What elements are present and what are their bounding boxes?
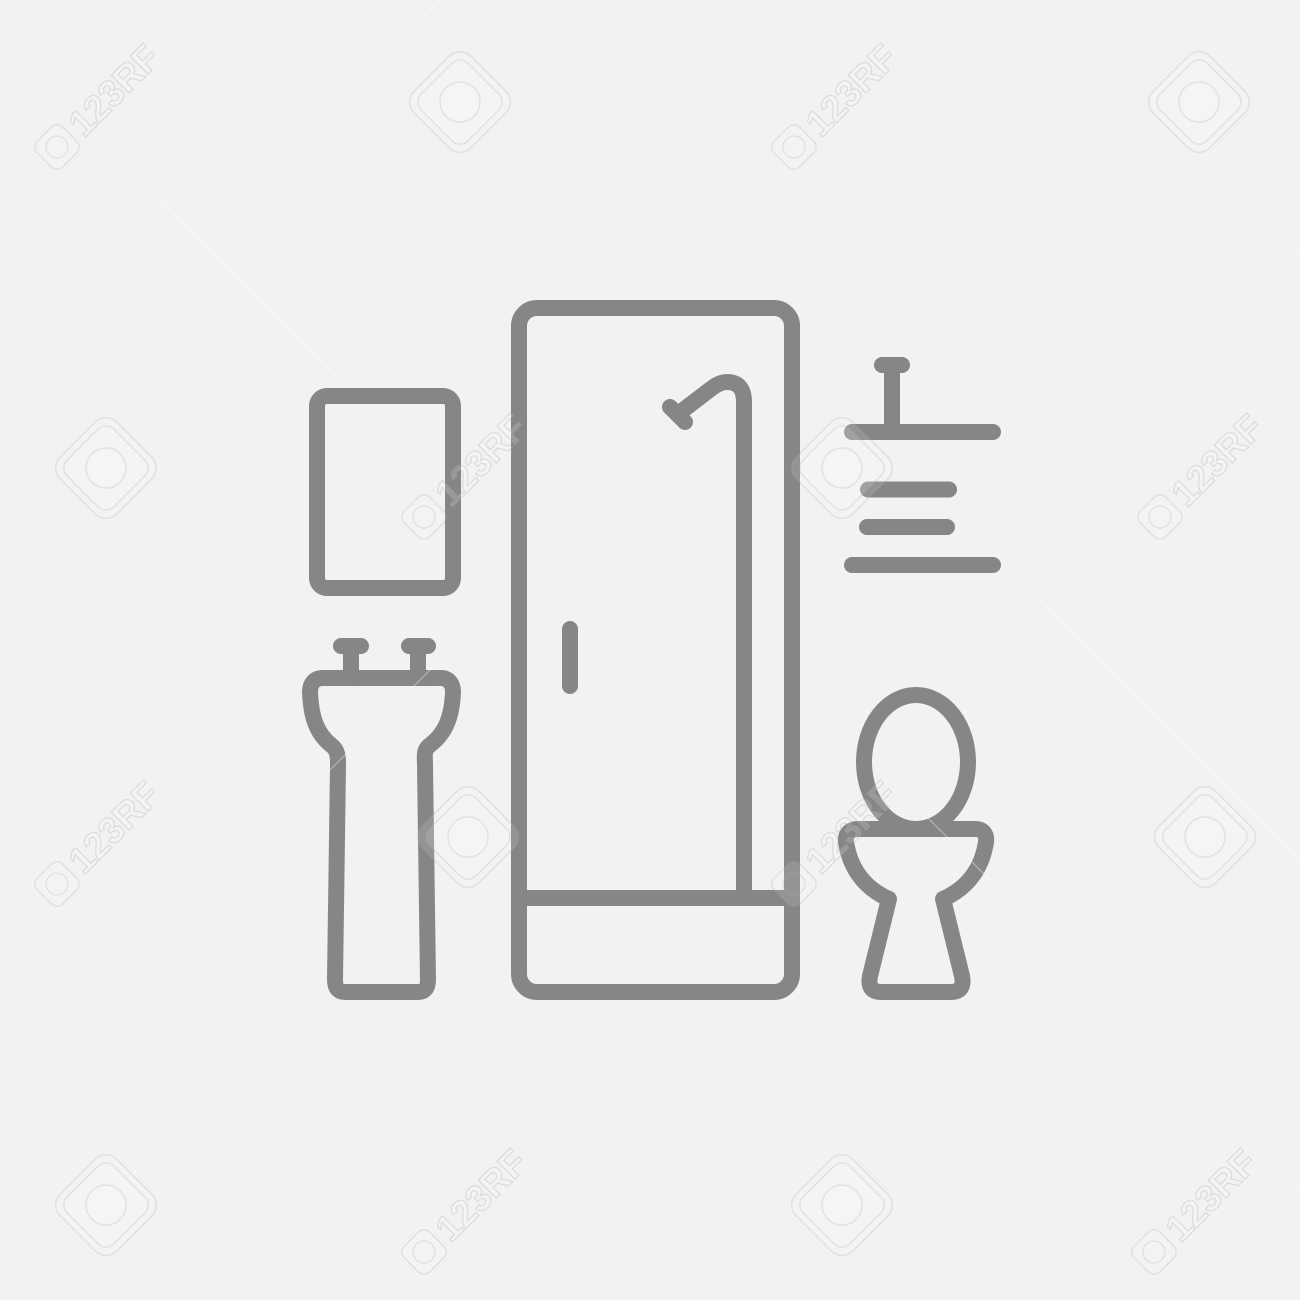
icon: towel shelf <box>852 365 993 565</box>
icon: bathroom set <box>310 308 993 992</box>
watermark logo 4 <box>1133 407 1271 545</box>
watermark logo 4: 123RF <box>1164 407 1271 514</box>
watermark logo 3 <box>397 407 535 545</box>
egg emblem 7 <box>49 1148 163 1262</box>
watermark logo 6 <box>767 774 905 912</box>
watermark logo 5 <box>30 774 168 912</box>
watermark logo 8: 123RF <box>1158 1142 1265 1249</box>
egg emblem 4 <box>785 411 899 525</box>
icon: toilet <box>846 695 986 992</box>
watermark logo 5: 123RF <box>61 774 168 881</box>
watermark logo 7 <box>397 1142 535 1280</box>
watermark logo 8 <box>1127 1142 1265 1280</box>
egg emblem 2 <box>1142 45 1256 159</box>
icon: shower cabin <box>519 308 792 992</box>
egg emblem 1 <box>403 45 517 159</box>
watermark logo 1: 123RF <box>61 37 168 144</box>
watermark logo 3: 123RF <box>428 407 535 514</box>
watermark logo 7: 123RF <box>428 1142 535 1249</box>
icon: mirror <box>317 396 453 588</box>
egg emblem 6 <box>1148 780 1262 894</box>
watermark logo 2: 123RF <box>798 37 905 144</box>
egg emblem 8 <box>785 1148 899 1262</box>
watermark logo 1 <box>30 37 168 175</box>
watermark logo 2 <box>767 37 905 175</box>
icon: pedestal sink <box>310 646 453 992</box>
egg emblem 5 <box>411 780 525 894</box>
egg emblem 3 <box>49 411 163 525</box>
watermark logo 6: 123RF <box>798 774 905 881</box>
